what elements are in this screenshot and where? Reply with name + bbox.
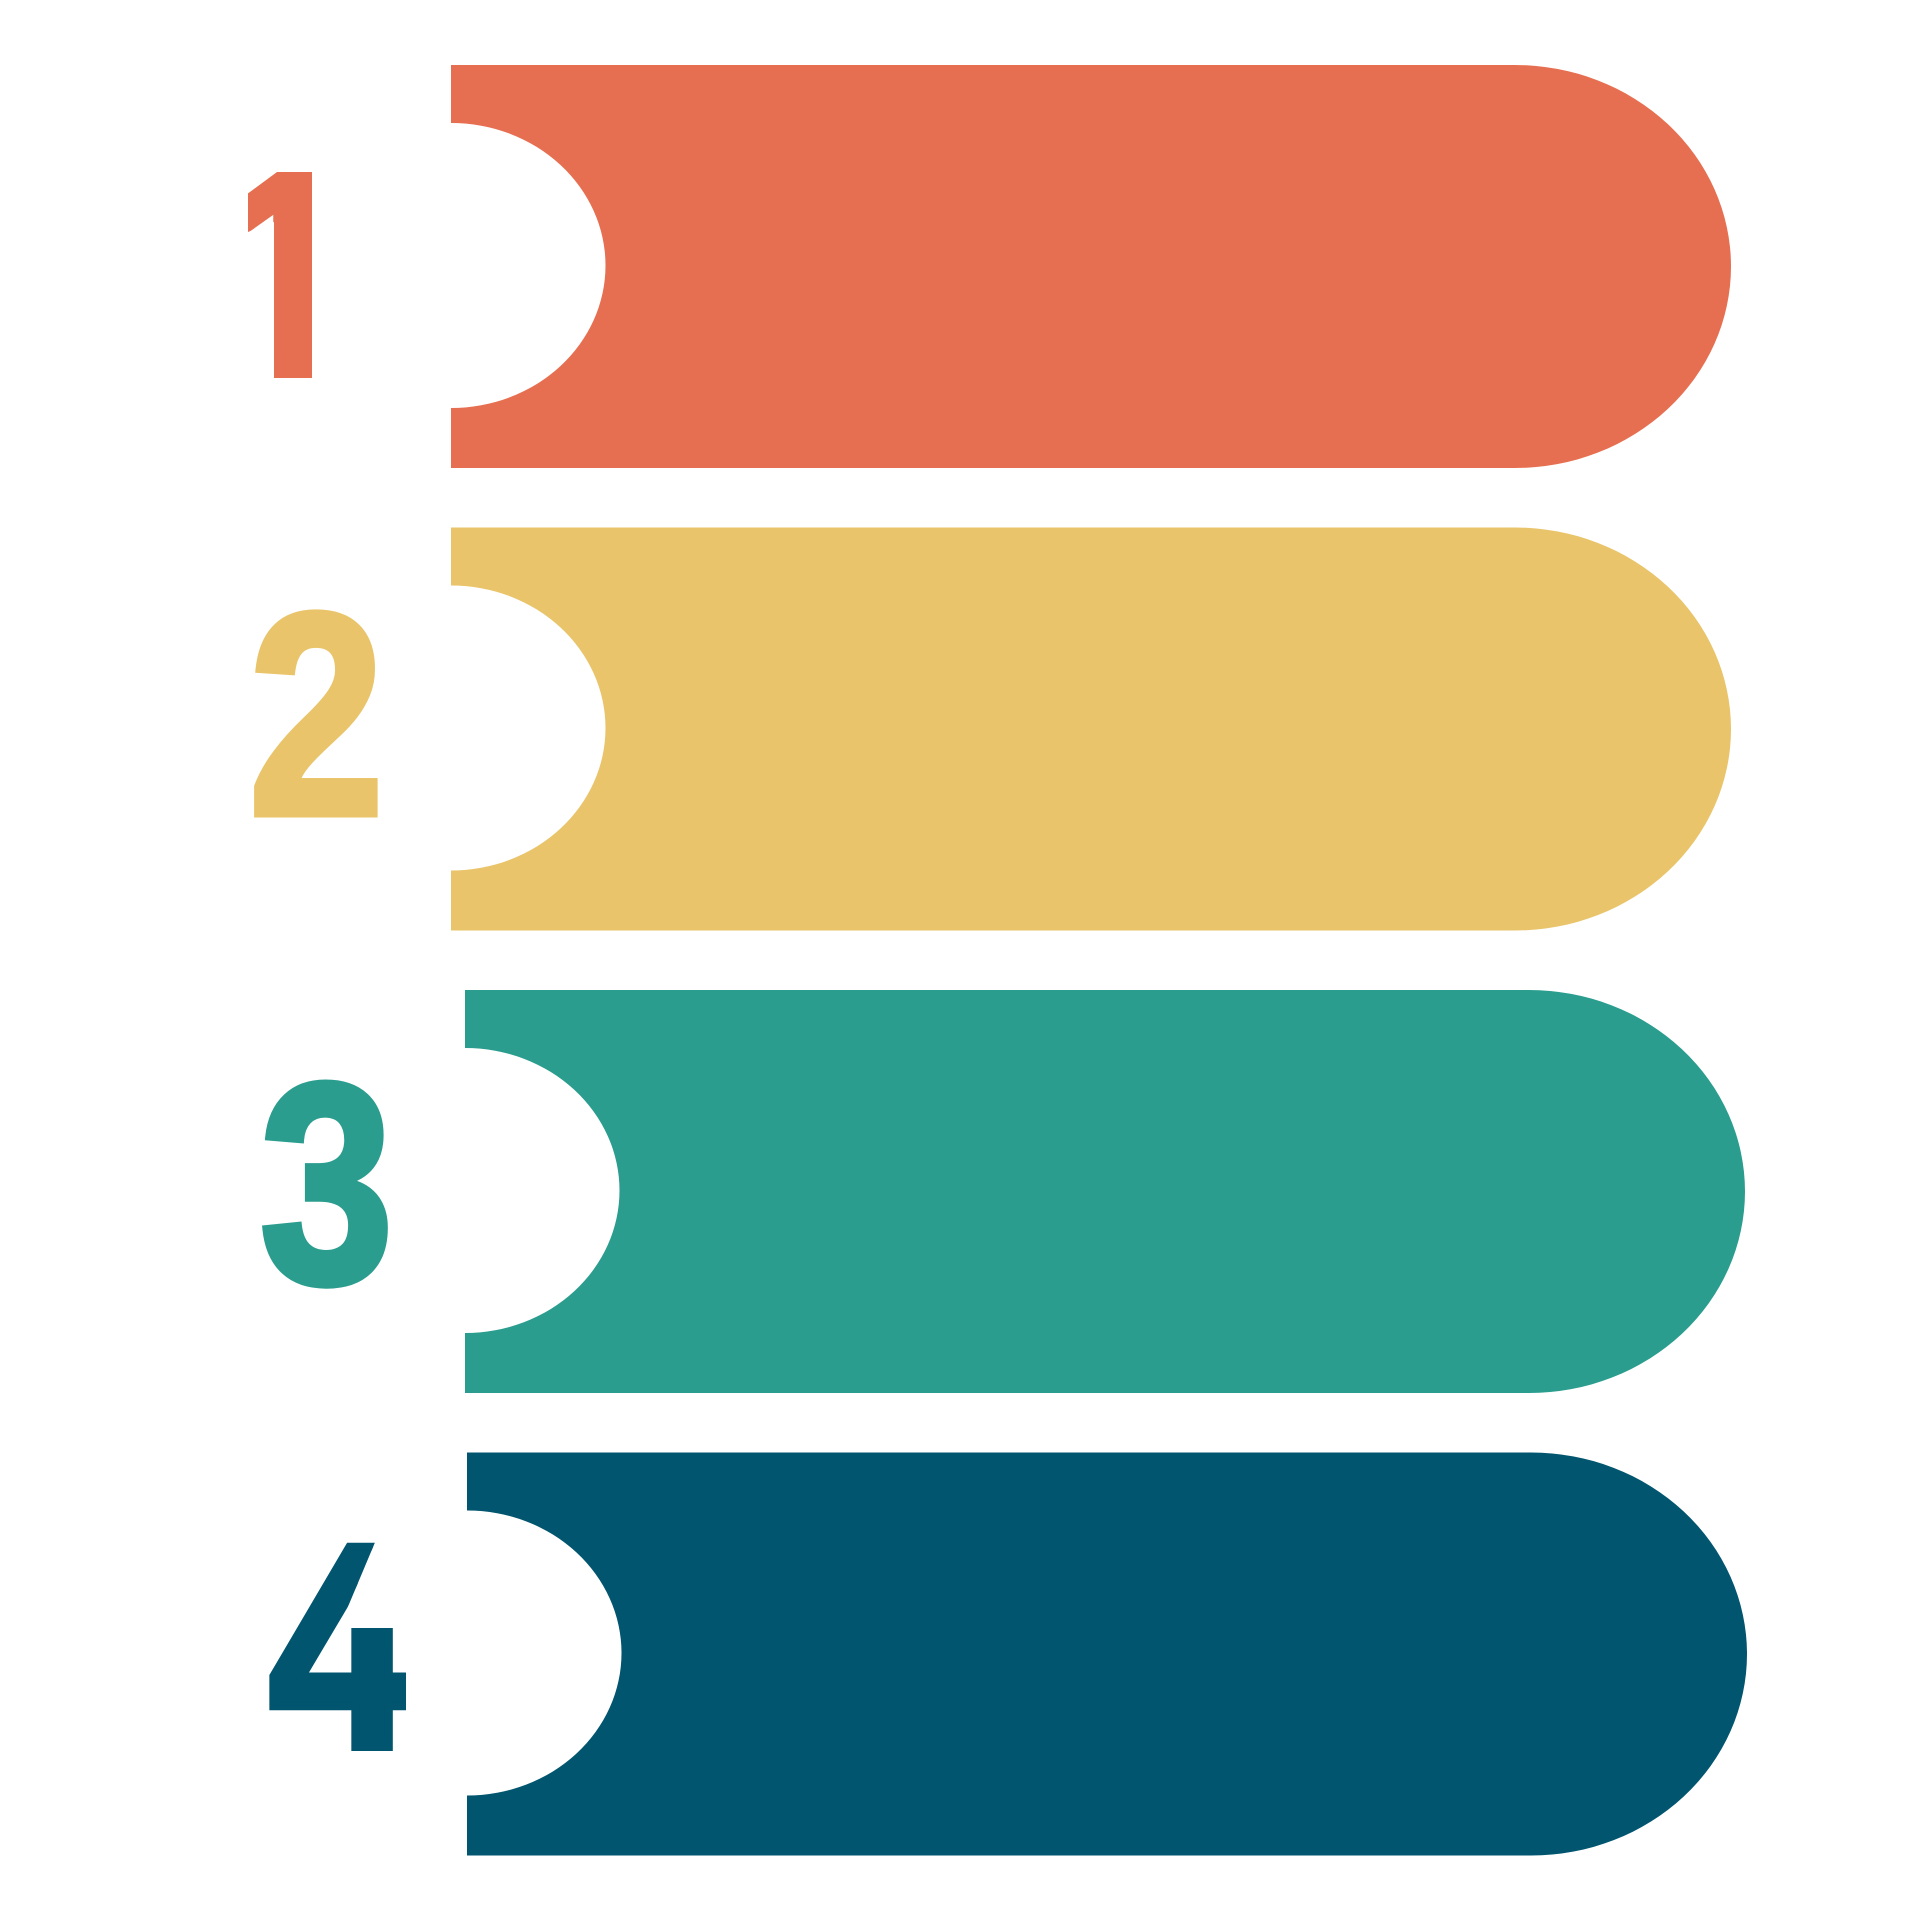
panel: step 4 banner (467, 1452, 1747, 1856)
panel: step 2 banner (451, 528, 1731, 930)
infographic canvas (248, 65, 1747, 1856)
panel: step 3 banner (465, 990, 1745, 1393)
number 1: 1 (215, 110, 360, 441)
number 2: 2 (249, 553, 384, 875)
number 4: 4 (269, 1483, 416, 1809)
number 3: 3 (260, 1024, 394, 1343)
panel: step 1 banner (451, 65, 1731, 468)
